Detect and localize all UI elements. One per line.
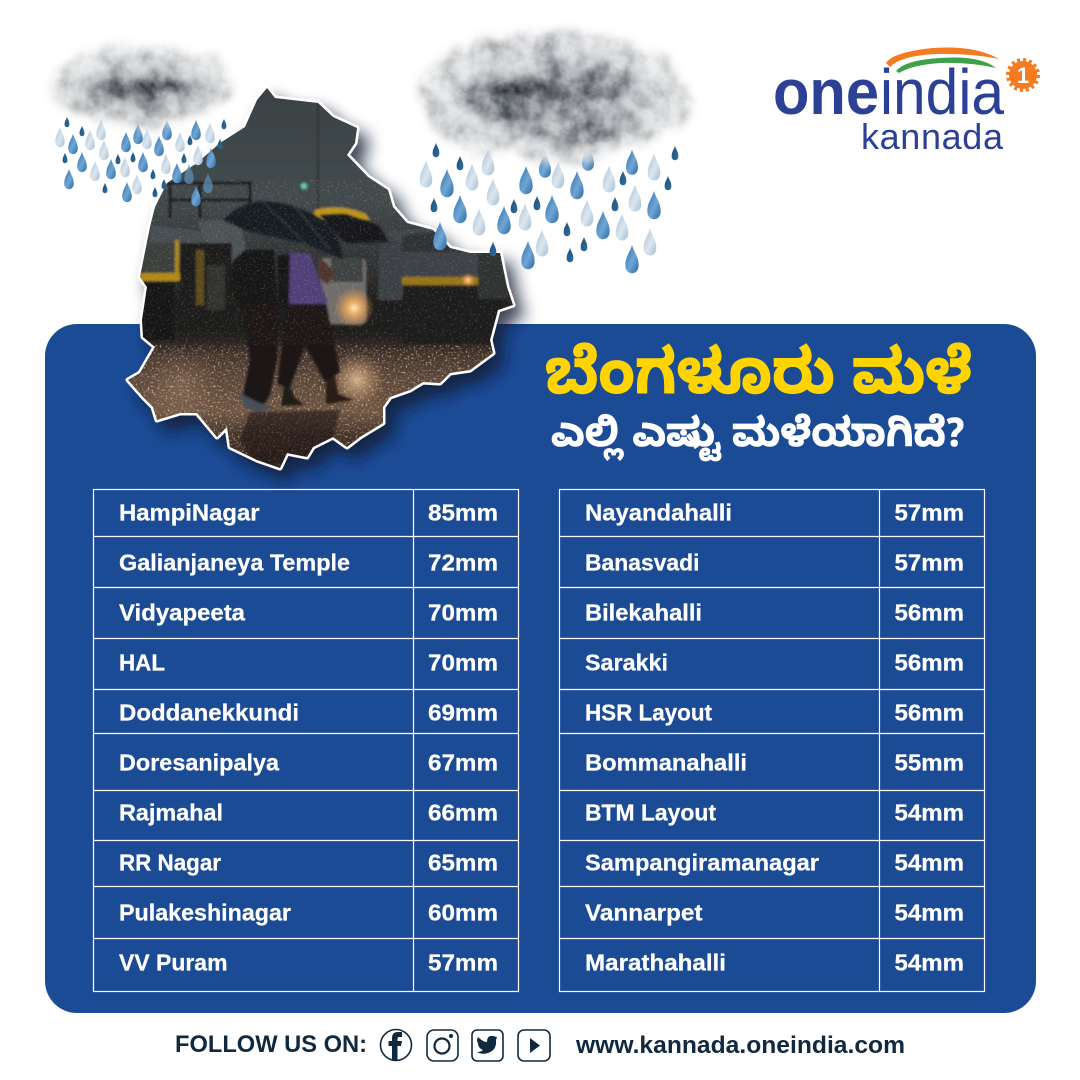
row: HampiNagar: 85mm	[428, 500, 498, 526]
row: Sarakki	[585, 650, 964, 676]
row: RR Nagar: RR Nagar	[119, 850, 221, 876]
map of Bengaluru with rainy street photo	[120, 80, 520, 475]
row: Marathahalli: Marathahalli	[585, 950, 726, 976]
row: Sarakki: 56mm	[894, 650, 964, 676]
row: Nayandahalli: 57mm	[894, 500, 964, 526]
icon: facebook	[380, 1030, 412, 1060]
row: Galianjaneya Temple: 72mm	[428, 550, 498, 576]
rain drops under left cloud	[55, 117, 226, 206]
row: Vidyapeeta: Vidyapeeta	[119, 600, 245, 626]
logo green swash	[896, 57, 996, 73]
row: Vidyapeeta: 70mm	[428, 600, 498, 626]
row: Banasvadi: 57mm	[894, 550, 964, 576]
right storm cloud	[423, 34, 683, 156]
row: Galianjaneya Temple: Galianjaneya Temple	[119, 550, 350, 576]
row: Doddanekkundi: 69mm	[428, 700, 498, 726]
row: HampiNagar	[119, 500, 498, 526]
row: Sampangiramanagar: Sampangiramanagar	[585, 850, 819, 876]
row: Nayandahalli: Nayandahalli	[585, 500, 732, 526]
row: VV Puram: VV Puram	[119, 950, 228, 976]
row: Rajmahal	[119, 800, 498, 826]
row: Vidyapeeta	[119, 600, 498, 626]
row: Bommanahalli: Bommanahalli	[585, 750, 747, 776]
row: Bilekahalli: Bilekahalli	[585, 600, 702, 626]
icon: instagram	[427, 1030, 458, 1061]
panel: blue background	[45, 324, 1036, 1013]
falling rain grain	[120, 180, 520, 345]
footer: follow us	[175, 1030, 905, 1061]
row: Banasvadi	[585, 550, 964, 576]
subheading: where and how much rain: ಎಲ್ಲಿ ಎಷ್ಟು ಮಳೆಯಾಗಿದೆ?	[551, 413, 965, 468]
row: Bilekahalli	[585, 600, 964, 626]
row: Galianjaneya Temple	[119, 550, 498, 576]
logo wordmark india: india	[880, 56, 1004, 128]
row: Pulakeshinagar: 60mm	[428, 900, 498, 926]
row: Nayandahalli	[585, 500, 964, 526]
row: Pulakeshinagar	[119, 900, 498, 926]
logo wordmark one: one	[773, 56, 879, 128]
row: Vannarpet: Vannarpet	[585, 900, 703, 926]
row: Doresanipalya	[119, 750, 498, 776]
row: Marathahalli	[585, 950, 964, 976]
row: RR Nagar	[119, 850, 498, 876]
row: HSR Layout	[585, 700, 964, 726]
row: Bilekahalli: 56mm	[894, 600, 964, 626]
row: Rajmahal: Rajmahal	[119, 800, 223, 826]
row: Pulakeshinagar: Pulakeshinagar	[119, 900, 291, 926]
logo anniversary badge	[1008, 60, 1038, 90]
row: BTM Layout: BTM Layout	[585, 800, 716, 826]
row: Rajmahal: 66mm	[428, 800, 498, 826]
website address: www.kannada.oneindia.com	[575, 1032, 905, 1059]
row: Vannarpet: 54mm	[894, 900, 964, 926]
row: HSR Layout: HSR Layout	[585, 700, 712, 726]
left rainfall table	[94, 490, 518, 992]
row: HAL	[119, 650, 498, 676]
logo word kannada: kannada	[861, 116, 1004, 157]
follow us label: FOLLOW US ON:	[175, 1031, 367, 1058]
street scene clipped to the map	[120, 80, 520, 475]
row: HAL: HAL	[119, 650, 165, 676]
umbrellas and walking people	[223, 201, 389, 470]
logo orange swash	[886, 47, 999, 67]
row: Bommanahalli: 55mm	[894, 750, 964, 776]
row: BTM Layout: 54mm	[894, 800, 964, 826]
row: Sampangiramanagar: 54mm	[894, 850, 964, 876]
left storm cloud	[54, 50, 230, 120]
row: Doddanekkundi	[119, 700, 498, 726]
row: Vannarpet	[585, 900, 964, 926]
logo: oneindia kannada	[773, 47, 1038, 157]
row: Bommanahalli	[585, 750, 964, 776]
rain drops under right cloud	[420, 143, 678, 273]
row: Sarakki: Sarakki	[585, 650, 668, 676]
row: HSR Layout: 56mm	[894, 700, 964, 726]
right rainfall table	[560, 490, 984, 992]
icon: play button	[518, 1030, 550, 1061]
row: Doresanipalya: Doresanipalya	[119, 750, 279, 776]
row: BTM Layout	[585, 800, 964, 826]
row: Marathahalli: 54mm	[894, 950, 964, 976]
road rain sparkle	[130, 345, 493, 468]
row: VV Puram	[119, 950, 498, 976]
icon: twitter	[472, 1030, 503, 1061]
row: VV Puram: 57mm	[428, 950, 498, 976]
row: HAL: 70mm	[428, 650, 498, 676]
row: Sampangiramanagar	[585, 850, 964, 876]
row: Doddanekkundi: Doddanekkundi	[119, 700, 299, 726]
heading: Bengaluru rain: ಬೆಂಗಳೂರು ಮಳೆ	[545, 342, 972, 427]
map white outline and drop shadow	[128, 88, 513, 468]
row: RR Nagar: 65mm	[428, 850, 498, 876]
row: Banasvadi: Banasvadi	[585, 550, 700, 576]
row: HampiNagar: HampiNagar	[119, 500, 260, 526]
row: Doresanipalya: 67mm	[428, 750, 498, 776]
logo anniversary badge: 1	[1017, 63, 1029, 88]
